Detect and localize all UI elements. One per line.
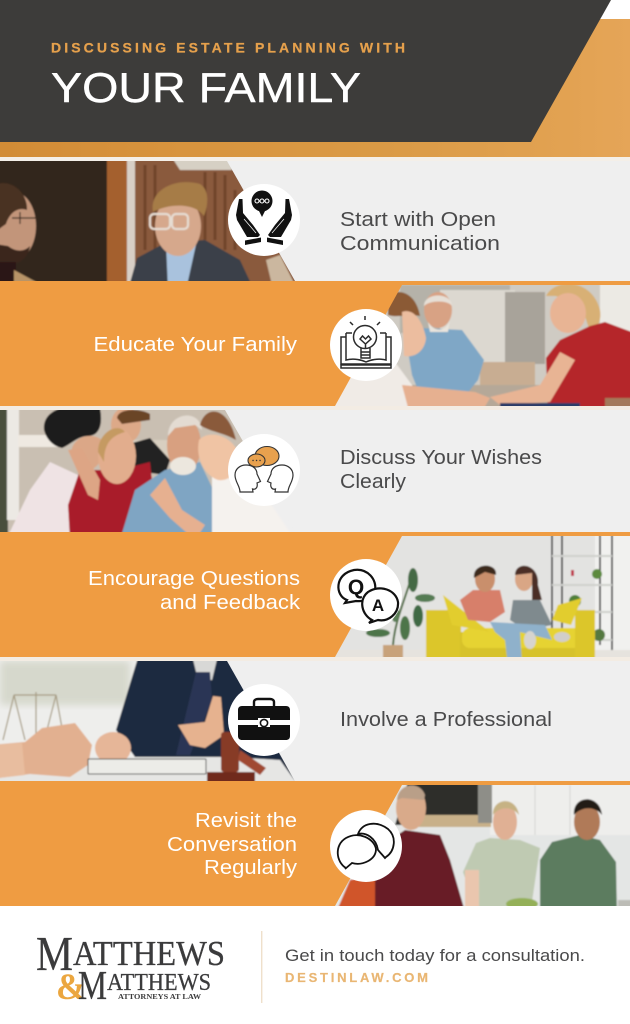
photo: two men talking xyxy=(0,161,295,281)
footer logo: Matthews & Matthews: ATTORNEYS AT LAW xyxy=(118,992,202,1001)
footer call to action xyxy=(285,946,585,985)
text: discuss your wishes clearly: Discuss Your Wishes xyxy=(340,447,542,469)
footer logo: Matthews & Matthews: M xyxy=(36,926,73,981)
title: YOUR FAMILY xyxy=(51,64,361,111)
title: DISCUSSING ESTATE PLANNING WITH xyxy=(51,40,405,56)
icon: Q and A speech bubbles: A xyxy=(372,596,384,615)
row 5: involve a professional xyxy=(0,661,630,785)
row 2: educate your family xyxy=(0,285,630,410)
title xyxy=(51,40,405,111)
text: revisit the conversation regularly xyxy=(167,810,297,879)
row 1: start with open communication xyxy=(0,161,630,285)
text: revisit the conversation regularly: Conversation xyxy=(167,834,297,856)
icon: hands holding speech bubble xyxy=(228,184,300,256)
row 6: revisit the conversation regularly xyxy=(0,785,630,906)
icon: two heads talking xyxy=(228,434,300,506)
text: involve a professional: Involve a Professional xyxy=(340,709,552,731)
text: start with open communication: Communication xyxy=(340,233,500,255)
text: start with open communication xyxy=(340,209,500,255)
icon: two speech bubbles xyxy=(330,810,402,882)
photo: family embracing xyxy=(0,410,243,532)
photo: family cooking in kitchen xyxy=(335,785,630,906)
text: encourage questions and feedback xyxy=(88,568,301,614)
text: discuss your wishes clearly xyxy=(340,447,542,493)
icon: Q and A speech bubbles xyxy=(330,559,402,631)
icon: light bulb and open book xyxy=(330,309,402,381)
header band xyxy=(0,0,630,161)
icon: Q and A speech bubbles: Q xyxy=(348,576,364,599)
photo: family holding hands xyxy=(335,285,630,406)
text: encourage questions and feedback: Encourage Questions xyxy=(88,568,300,590)
text: educate your family: Educate Your Family xyxy=(94,334,297,356)
footer logo: Matthews & Matthews: ATTHEWS xyxy=(107,970,211,996)
text: revisit the conversation regularly: Revisit the xyxy=(195,810,297,832)
text: revisit the conversation regularly: Regularly xyxy=(204,857,297,879)
row 4: encourage questions and feedback xyxy=(0,536,630,661)
footer divider xyxy=(261,931,262,1003)
photo: lawyer with gavel xyxy=(0,661,295,781)
photo: couple on yellow sofa xyxy=(335,536,630,657)
text: start with open communication: Start with Open xyxy=(340,209,496,231)
text: encourage questions and feedback: and Feedback xyxy=(160,592,301,614)
row 3: discuss your wishes clearly xyxy=(0,410,630,536)
footer call to action: DESTINLAW.COM xyxy=(285,970,428,985)
footer logo: Matthews & Matthews: M xyxy=(78,962,107,1008)
footer logo: Matthews & Matthews xyxy=(36,926,225,1008)
footer logo: Matthews & Matthews: ATTHEWS xyxy=(73,934,225,973)
icon: briefcase xyxy=(228,684,300,756)
header dark panel xyxy=(0,0,611,142)
footer logo: Matthews & Matthews: & xyxy=(56,967,86,1008)
footer call to action: Get in touch today for a consultation. xyxy=(285,946,585,965)
text: discuss your wishes clearly: Clearly xyxy=(340,471,406,493)
